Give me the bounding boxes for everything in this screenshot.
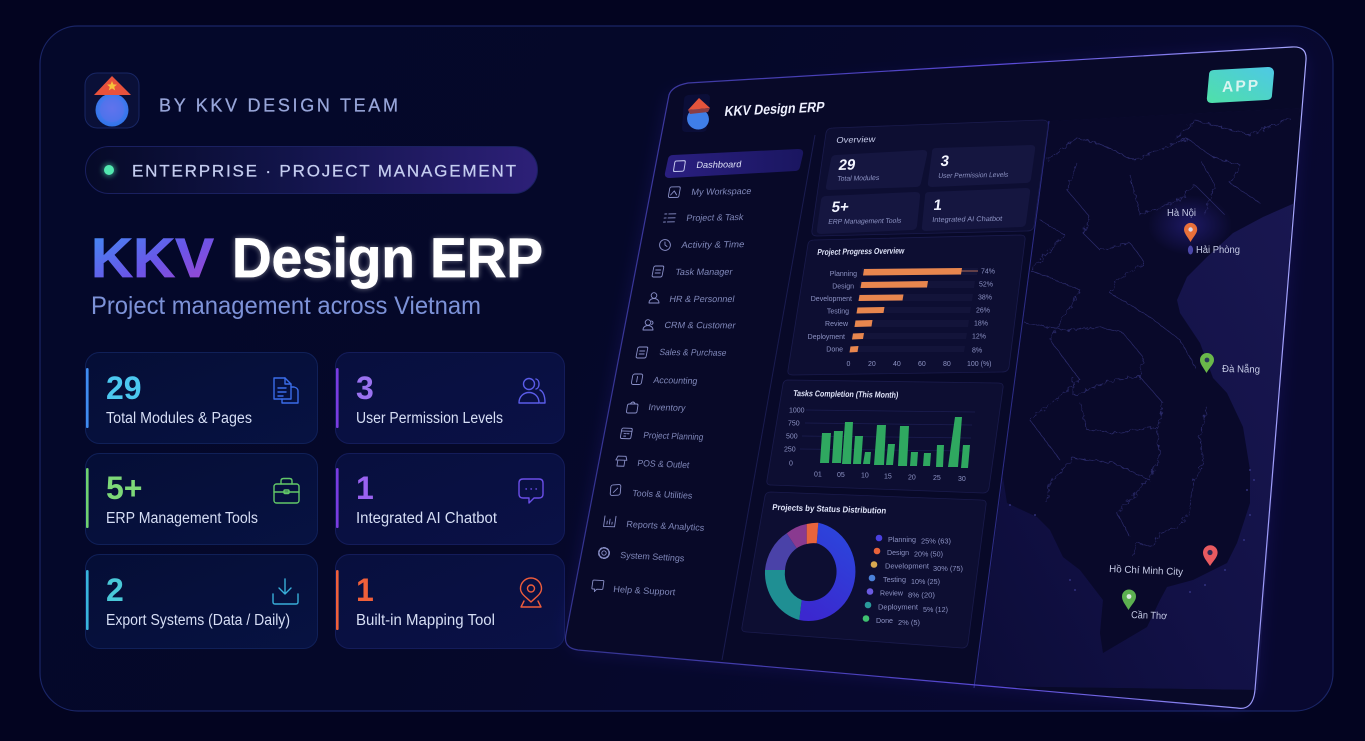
nav: POS & Outlet bbox=[615, 456, 691, 470]
nav: Activity & Time: Activity & Time bbox=[681, 239, 745, 250]
overview card: 5+: ERP Management Tools bbox=[828, 218, 902, 226]
panel: map bbox=[975, 105, 1305, 690]
panel: project progress bbox=[788, 235, 1025, 375]
overview card: 29: Total Modules bbox=[837, 175, 880, 183]
stat card: AI chatbot: 1 bbox=[356, 470, 374, 506]
window body bbox=[566, 47, 1306, 708]
nav: Project Planning: Project Planning bbox=[643, 430, 704, 442]
progress bar chart: 8% bbox=[972, 348, 982, 354]
nav: Dashboard: Dashboard bbox=[696, 159, 742, 170]
progress bar chart: 12% bbox=[972, 334, 986, 340]
tasks bar chart bbox=[784, 408, 975, 483]
map province borders bbox=[1025, 118, 1290, 557]
nav: Dashboard bbox=[673, 159, 742, 172]
progress bar chart: Planning bbox=[830, 271, 857, 278]
progress bar chart: 26% bbox=[976, 308, 990, 314]
stat card: total modules: Total Modules & Pages bbox=[106, 410, 252, 427]
nav: Tools & Utilities: Tools & Utilities bbox=[632, 488, 693, 501]
icon: map pin bbox=[520, 578, 542, 607]
donut legend: Done bbox=[876, 618, 893, 625]
progress bar chart: Deployment bbox=[808, 334, 845, 341]
icon: chat bubble bbox=[519, 479, 543, 503]
tasks bar chart: 15 bbox=[884, 474, 892, 480]
icon: users bbox=[519, 378, 545, 403]
logo badge bbox=[85, 73, 139, 128]
donut legend: 25% (63) bbox=[921, 538, 951, 546]
donut legend: 8% (20) bbox=[908, 592, 935, 600]
overview card: 5+: 5+ bbox=[830, 199, 850, 216]
tasks bar chart: 20 bbox=[908, 474, 916, 482]
icon: download bbox=[273, 579, 298, 604]
progress bar chart: Development bbox=[811, 296, 852, 303]
stat card: user permission levels: User Permission Levels bbox=[356, 410, 503, 427]
progress bar chart: Design bbox=[832, 284, 854, 290]
stat card: mapping tool: 1 bbox=[356, 572, 374, 608]
map frame line bbox=[974, 121, 1049, 688]
overview card: 5+ bbox=[817, 192, 920, 234]
map marker: Hà Nội: Hà Nội bbox=[1167, 208, 1196, 219]
donut legend: 10% (25) bbox=[911, 579, 940, 586]
nav: Accounting: Accounting bbox=[653, 375, 698, 386]
progress bar chart bbox=[808, 268, 995, 368]
subtitle: Project management across Vietnam bbox=[91, 292, 481, 320]
stat card: user permission levels: 3 bbox=[356, 370, 374, 406]
map marker: Hồ Chí Minh City bbox=[1109, 545, 1218, 578]
overview card: 1: Integrated AI Chatbot bbox=[932, 216, 1003, 224]
map marker: Đà Nẵng: Đà Nẵng bbox=[1222, 362, 1260, 376]
donut legend bbox=[863, 535, 963, 627]
donut legend: Design bbox=[887, 550, 909, 557]
active nav highlight bbox=[665, 149, 803, 178]
icon: briefcase bbox=[274, 478, 299, 503]
category pill bbox=[86, 146, 538, 194]
panel: projects by status bbox=[742, 492, 986, 648]
stat card: ERP management tools bbox=[86, 454, 318, 544]
stat card: mapping tool: Built-in Mapping Tool bbox=[356, 612, 495, 629]
title: KKV bbox=[91, 226, 214, 289]
overview card: 1: 1 bbox=[933, 197, 943, 214]
nav: My Workspace bbox=[668, 186, 752, 198]
tasks bar chart: 500 bbox=[786, 434, 798, 440]
map marker: Hồ Chí Minh City: Hồ Chí Minh City bbox=[1109, 563, 1183, 578]
app badge: APP bbox=[1222, 77, 1258, 96]
nav: Reports & Analytics bbox=[604, 516, 705, 533]
nav: CRM & Customer: CRM & Customer bbox=[664, 320, 736, 330]
panel: tasks completion bbox=[767, 380, 1003, 493]
nav: Task Manager bbox=[652, 266, 733, 277]
map land bbox=[990, 105, 1305, 653]
donut legend: 2% (5) bbox=[898, 620, 920, 627]
panel: overview: Overview bbox=[836, 134, 877, 145]
nav: Task Manager: Task Manager bbox=[675, 267, 733, 277]
nav: POS & Outlet: POS & Outlet bbox=[637, 458, 691, 470]
map marker: Hà Nội bbox=[1167, 208, 1197, 242]
panel: project progress: Project Progress Overview bbox=[817, 246, 905, 257]
nav: Help & Support: Help & Support bbox=[613, 584, 676, 597]
tasks bar chart: 250 bbox=[784, 446, 796, 454]
nav: HR & Personnel: HR & Personnel bbox=[669, 294, 735, 304]
tasks bar chart: 25 bbox=[933, 475, 941, 482]
stat card: export systems bbox=[86, 554, 318, 648]
donut chart bbox=[765, 523, 855, 621]
icon: documents bbox=[274, 378, 298, 403]
progress bar chart: 52% bbox=[979, 282, 993, 288]
progress bar chart: 60 bbox=[918, 361, 926, 368]
title: Design ERP bbox=[232, 226, 543, 289]
progress bar chart: 100 (%) bbox=[967, 361, 992, 368]
stat card: user permission levels bbox=[336, 352, 564, 444]
panel: overview bbox=[812, 120, 1048, 236]
nav: Project Planning bbox=[620, 428, 704, 442]
donut legend: Development bbox=[885, 564, 929, 570]
nav: Help & Support bbox=[591, 580, 676, 597]
panel: projects by status: Projects by Status Distribution bbox=[772, 502, 887, 516]
nav: Project & Task: Project & Task bbox=[686, 212, 745, 223]
map marker: Đà Nẵng bbox=[1200, 353, 1260, 376]
tasks bar chart: 01 bbox=[814, 472, 822, 478]
stat card: total modules: 29 bbox=[106, 370, 142, 406]
progress bar chart: 74% bbox=[981, 268, 995, 276]
stat card: ERP management tools: 5+ bbox=[106, 470, 142, 506]
panel: app window bbox=[566, 47, 1306, 708]
nav: System Settings bbox=[599, 548, 685, 563]
overview card: 3: User Permission Levels bbox=[938, 172, 1009, 180]
stat card: AI chatbot bbox=[336, 454, 564, 544]
sidebar divider bbox=[722, 135, 815, 660]
donut legend: Review bbox=[880, 590, 904, 598]
sidebar navigation bbox=[591, 149, 803, 597]
tasks bar chart: 750 bbox=[788, 420, 800, 428]
donut legend: 20% (50) bbox=[914, 552, 943, 558]
stat card: mapping tool bbox=[336, 554, 564, 648]
app badge bbox=[1207, 67, 1274, 103]
tasks bar chart: 1000 bbox=[789, 408, 805, 414]
panel: tasks completion: Tasks Completion (This Month) bbox=[793, 388, 899, 400]
stat card: export systems: Export Systems (Data / Daily) bbox=[106, 612, 290, 629]
stat card: ERP management tools: ERP Management Tools bbox=[106, 510, 258, 527]
map marker: Cần Thơ bbox=[1122, 590, 1168, 622]
progress bar chart: 38% bbox=[978, 294, 992, 302]
progress bar chart: 0 bbox=[846, 361, 850, 368]
progress bar chart: Done bbox=[826, 346, 843, 354]
map marker: Cần Thơ: Cần Thơ bbox=[1131, 609, 1168, 622]
overview card: 1 bbox=[922, 188, 1030, 231]
category pill: ENTERPRISE · PROJECT MANAGEMENT bbox=[132, 162, 516, 181]
byline: BY KKV DESIGN TEAM bbox=[159, 96, 398, 116]
stat card: total modules bbox=[86, 352, 318, 444]
nav: System Settings: System Settings bbox=[620, 550, 685, 563]
progress bar chart: 20 bbox=[868, 361, 876, 368]
tablet glow bbox=[566, 47, 1306, 708]
window edge bbox=[566, 47, 1306, 708]
donut legend: Planning bbox=[888, 537, 916, 544]
nav: HR & Personnel bbox=[649, 293, 735, 304]
overview card: 3 bbox=[928, 145, 1035, 187]
tasks bar chart: 0 bbox=[789, 460, 793, 468]
progress bar chart: 80 bbox=[943, 361, 951, 368]
tasks bar chart: 10 bbox=[861, 472, 869, 480]
nav: Tools & Utilities bbox=[610, 484, 693, 501]
nav: Sales & Purchase: Sales & Purchase bbox=[659, 347, 727, 358]
nav: Inventory: Inventory bbox=[648, 402, 687, 413]
donut legend: 5% (12) bbox=[923, 607, 948, 614]
window logo bbox=[682, 94, 712, 133]
tasks bar chart: 05 bbox=[837, 472, 845, 479]
progress bar chart: Review bbox=[825, 321, 849, 328]
nav: Accounting bbox=[631, 374, 698, 386]
map marker: Hải Phòng: Hải Phòng bbox=[1196, 245, 1240, 256]
donut legend: 30% (75) bbox=[933, 566, 963, 573]
stat card: export systems: 2 bbox=[106, 572, 124, 608]
progress bar chart: 40 bbox=[893, 361, 901, 368]
progress bar chart: Testing bbox=[827, 308, 849, 316]
donut legend: Testing bbox=[883, 577, 906, 584]
stat card: AI chatbot: Integrated AI Chatbot bbox=[356, 510, 498, 527]
nav: My Workspace: My Workspace bbox=[691, 186, 752, 197]
nav: Activity & Time bbox=[660, 239, 745, 250]
nav: Reports & Analytics: Reports & Analytics bbox=[626, 519, 705, 533]
overview card: 29: 29 bbox=[837, 157, 857, 174]
overview card: 29 bbox=[826, 150, 927, 190]
nav: Inventory bbox=[626, 402, 687, 413]
progress bar chart: 18% bbox=[974, 320, 988, 328]
overview card: 3: 3 bbox=[939, 153, 950, 170]
title bbox=[91, 226, 543, 289]
window title: KKV Design ERP bbox=[724, 98, 826, 119]
tasks bar chart: 30 bbox=[958, 476, 966, 483]
donut legend: Deployment bbox=[878, 604, 918, 612]
